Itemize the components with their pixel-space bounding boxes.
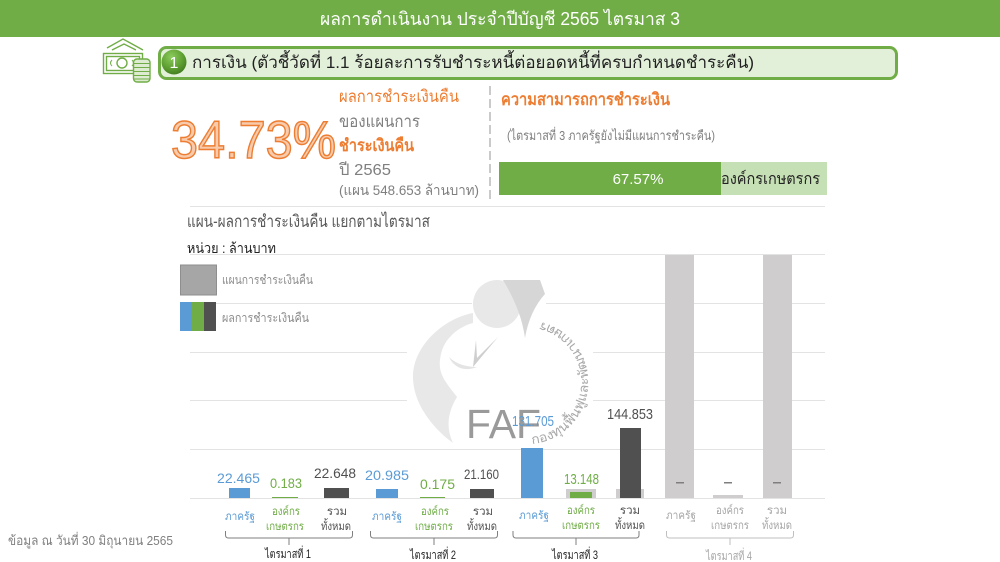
- progress bar: [499, 162, 827, 195]
- legend: plan: แผนการชำระเงินคืน: [222, 273, 313, 287]
- quarter 3 axis labels: ภาครัฐ: [519, 510, 549, 522]
- quarter 2 axis labels: รวม: [473, 506, 493, 518]
- quarter names: ไตรมาสที่ 3: [551, 546, 598, 562]
- quarter 1 axis labels: ทั้งหมด: [321, 518, 351, 533]
- quarter 1 axis labels: [225, 504, 351, 533]
- quarter 3 axis labels: เกษตรกร: [562, 520, 600, 532]
- progress bar: 67.57%: [613, 171, 663, 188]
- quarter 3 bars: 131.705: [512, 413, 554, 430]
- quarter 2 bars: [365, 466, 499, 498]
- quarter 2 bars: 20.985: [365, 467, 409, 483]
- quarter 4 axis labels: รวม: [767, 505, 787, 517]
- quarter names: ไตรมาสที่ 2: [409, 546, 456, 562]
- quarter names: [264, 545, 752, 562]
- quarter 2 axis labels: ทั้งหมด: [467, 518, 497, 533]
- header bar: [0, 0, 1000, 37]
- quarter 1 axis labels: รวม: [327, 506, 347, 518]
- repayment result text block: ผลการชำระเงินคืน: [339, 87, 459, 106]
- quarter 1 bars: 22.465: [217, 470, 260, 486]
- repayment result text block: (แผน 548.653 ล้านบาท): [339, 182, 479, 198]
- repayment result text block: ชำระเงินคืน: [339, 135, 414, 155]
- quarter 1 bars: 0.183: [270, 475, 302, 491]
- quarter 3 axis labels: องค์กร: [567, 503, 595, 517]
- repayment result text block: ปี 2565: [339, 161, 391, 179]
- big percentage: 34.73%: [171, 111, 336, 170]
- quarter 2 bars: 21.160: [464, 466, 499, 482]
- chart title: แผน-ผลการชำระเงินคืน แยกตามไตรมาส: [187, 211, 430, 231]
- quarter 1 axis labels: องค์กร: [272, 504, 300, 518]
- number badge: 1: [170, 55, 179, 72]
- legend: result: ผลการชำระเงินคืน: [222, 311, 309, 325]
- progress bar: องค์กรเกษตรกร: [721, 169, 820, 188]
- quarter 3 bars: 144.853: [607, 406, 653, 423]
- quarter 1 bars: 22.648: [314, 465, 356, 481]
- header bar: ผลการดำเนินงาน ประจำปีบัญชี 2565 ไตรมาส 3: [320, 8, 680, 29]
- repayment ability panel: ความสามารถการชำระเงิน: [501, 90, 670, 109]
- quarter 3 bars: [512, 406, 653, 498]
- dashed divider: [489, 86, 491, 202]
- section heading pill: [160, 48, 896, 78]
- quarter 1 axis labels: เกษตรกร: [266, 521, 304, 533]
- quarter 3 axis labels: ทั้งหมด: [615, 517, 645, 532]
- quarter 2 axis labels: ภาครัฐ: [372, 511, 402, 523]
- quarter 4 axis labels: เกษตรกร: [711, 520, 749, 532]
- quarter names: ไตรมาสที่ 1: [264, 545, 311, 561]
- watermark logo: [407, 280, 593, 447]
- quarter 2 axis labels: [372, 504, 497, 533]
- quarter 1 bars: [217, 465, 356, 498]
- chart gridlines: [190, 206, 825, 498]
- legend: [180, 265, 313, 331]
- quarter 3 axis labels: รวม: [620, 505, 640, 517]
- watermark letters: FAF: [466, 401, 541, 447]
- quarter 2 bars: 0.175: [420, 476, 455, 492]
- repayment ability panel: (ไตรมาสที่ 3 ภาครัฐยังไม่มีแผนการชำระคืน): [507, 127, 715, 144]
- unit label: หน่วย : ล้านบาท: [187, 240, 276, 256]
- quarter 2 axis labels: องค์กร: [421, 504, 449, 518]
- icon: money and coins: [104, 39, 150, 82]
- quarter brackets: [226, 531, 794, 545]
- repayment result text block: ของแผนการ: [339, 112, 420, 131]
- quarter 4 axis labels: [666, 503, 792, 532]
- quarter 4 plan bars: [665, 255, 792, 498]
- data date note: ข้อมูล ณ วันที่ 30 มิถุนายน 2565: [8, 532, 173, 549]
- quarter 4 axis labels: ภาครัฐ: [666, 510, 696, 522]
- number badge: [162, 50, 186, 74]
- section heading pill: การเงิน (ตัวชี้วัดที่ 1.1 ร้อยละการรับชำระหนี้ต่อยอดหนี้ที่ครบกำหนดชำระคืน): [192, 50, 754, 72]
- quarter 3 bars: 13.148: [564, 471, 599, 488]
- repayment ability panel: [499, 90, 827, 195]
- quarter 2 axis labels: เกษตรกร: [415, 521, 453, 533]
- quarter 3 axis labels: [519, 503, 645, 532]
- quarter 4 axis labels: องค์กร: [716, 503, 744, 517]
- bar chart: [217, 255, 792, 498]
- quarter 4 axis labels: ทั้งหมด: [762, 517, 792, 532]
- quarter 1 axis labels: ภาครัฐ: [225, 511, 255, 523]
- repayment result text block: [339, 87, 479, 198]
